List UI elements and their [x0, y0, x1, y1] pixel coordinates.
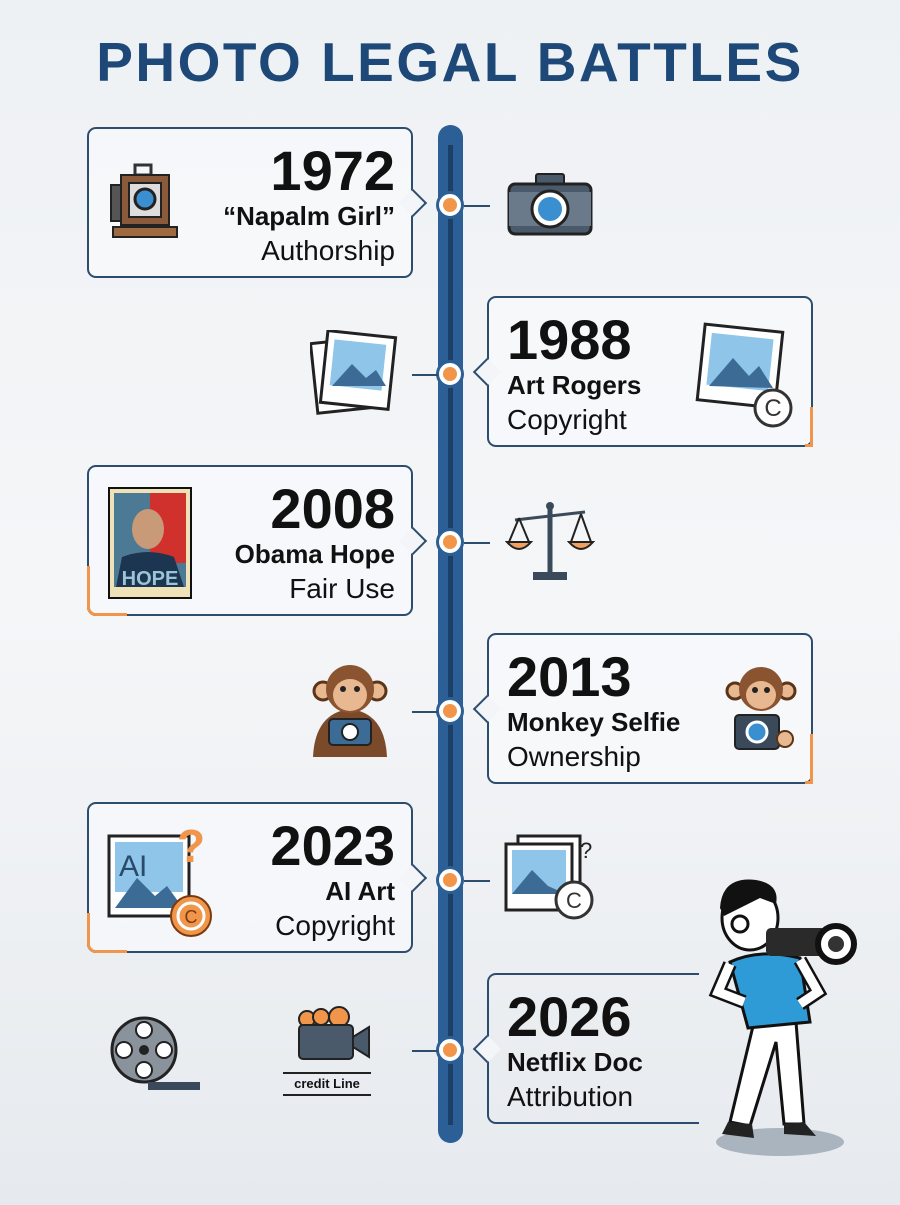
title: PHOTO LEGAL BATTLES	[96, 31, 804, 93]
text: 2013: Monkey Selfie	[507, 707, 680, 737]
icon: photo copyright	[696, 322, 792, 428]
illustration: photographer	[708, 880, 857, 1156]
icon: photo question copyright	[504, 834, 594, 920]
icon: view camera	[110, 164, 178, 238]
text: 1972: “Napalm Girl”	[223, 201, 395, 231]
text: 2026: Attribution	[507, 1081, 633, 1112]
card: 2008	[87, 465, 413, 616]
icon: camera right 1972	[508, 173, 592, 236]
icon: AI art: C	[184, 907, 198, 927]
icon: photos left 1988	[310, 330, 398, 415]
node 2026	[436, 1036, 464, 1064]
text: 2026: 2026	[507, 985, 632, 1048]
text: 2013: Ownership	[507, 741, 641, 772]
text: 1988: Copyright	[507, 404, 627, 435]
icon: photo question copyright: C	[566, 888, 582, 913]
icon: monkey with camera	[726, 667, 796, 750]
text: 2026: Netflix Doc	[507, 1047, 643, 1077]
card: 2026	[487, 973, 699, 1124]
text: 1988: 1988	[507, 308, 632, 371]
icon: hope poster	[108, 487, 192, 599]
icon: monkey left	[312, 665, 388, 757]
text: 2008: 2008	[270, 477, 395, 540]
text: 2008	[235, 477, 395, 604]
icon: movie camera credit line	[283, 1006, 371, 1096]
text: 1988	[507, 308, 641, 435]
node 2023	[436, 866, 464, 894]
node 2013	[436, 697, 464, 725]
icon: photo question copyright: ?	[580, 838, 592, 863]
text: 2023: Copyright	[275, 910, 395, 941]
icon: AI art: AI	[119, 850, 147, 883]
text: 2023: 2023	[270, 814, 395, 877]
text: 2008: Fair Use	[289, 573, 395, 604]
text: 1972	[223, 139, 395, 266]
text: 2013: 2013	[507, 645, 632, 708]
text: 1988: Art Rogers	[507, 370, 641, 400]
text: 2023: AI Art	[325, 876, 395, 906]
icon: AI art	[108, 820, 212, 937]
card: 1988	[487, 296, 813, 447]
icon: hope poster: HOPE	[122, 568, 178, 590]
card: 2013	[487, 633, 813, 784]
card: 2023	[87, 802, 413, 953]
icon: scales	[505, 502, 595, 580]
text: 2026	[507, 985, 643, 1112]
node 1988	[436, 360, 464, 388]
text: 1972: 1972	[270, 139, 395, 202]
icon: photo copyright: C	[764, 395, 782, 422]
icon: film reel	[110, 1016, 200, 1090]
node 2008	[436, 528, 464, 556]
icon: AI art: ?	[177, 820, 205, 872]
card: 1972	[87, 127, 413, 278]
text: 2008: Obama Hope	[235, 539, 395, 569]
text: 2013	[507, 645, 680, 772]
node 1972	[436, 191, 464, 219]
text: 2023	[270, 814, 395, 941]
timeline bar	[438, 125, 463, 1143]
text: 1972: Authorship	[261, 235, 395, 266]
icon: movie camera credit line: credit Line	[294, 1076, 360, 1091]
